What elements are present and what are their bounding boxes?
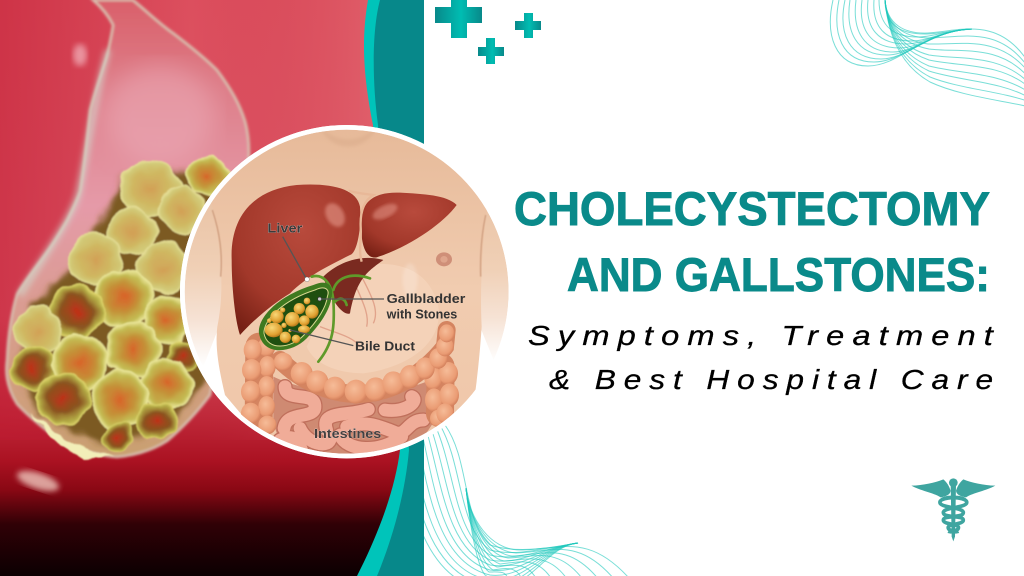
label: Bile Duct: Bile Duct [355, 339, 416, 353]
title [514, 182, 990, 301]
torso [212, 130, 487, 454]
label: with Stones: with Stones [386, 308, 457, 322]
light reflection splotch [15, 467, 61, 495]
gallbladder [259, 283, 332, 350]
subtitle: & Best Hospital Care [549, 364, 1001, 395]
title: AND GALLSTONES: [567, 248, 990, 301]
bile ducts [312, 276, 370, 362]
collar shading [332, 138, 364, 144]
small intestine [280, 387, 423, 457]
label: Liver: Liver [267, 221, 302, 235]
dark area under liver [323, 258, 383, 314]
liver right lobe [232, 185, 360, 335]
stomach area shading [307, 264, 439, 373]
liver left lobe [361, 193, 457, 258]
icon: caduceus [911, 478, 995, 541]
icon: medical crosses [435, 0, 541, 64]
colon [241, 324, 459, 434]
circular anatomy illustration [180, 120, 520, 463]
falciform ligament [348, 191, 373, 262]
arms [184, 186, 224, 358]
bladder stones [265, 298, 319, 343]
colon backing [259, 330, 447, 423]
label: Intestines: Intestines [314, 427, 381, 441]
title: CHOLECYSTECTOMY [514, 182, 990, 235]
subtitle: Symptoms, Treatment [528, 320, 1001, 351]
label: Gallbladder: Gallbladder [387, 292, 465, 306]
gallbladder sac [6, 0, 249, 457]
photo panel: gallbladder with stones [0, 0, 424, 576]
leader lines [283, 237, 384, 346]
wave decoration: top right [830, 0, 1024, 106]
teal curved band [357, 0, 424, 576]
subtitle [528, 320, 1001, 395]
gallstones cluster [11, 157, 240, 458]
nipple [436, 252, 452, 266]
armpit creases [212, 210, 486, 277]
wave decoration: bottom left [424, 426, 628, 576]
abdomen base [273, 376, 432, 454]
